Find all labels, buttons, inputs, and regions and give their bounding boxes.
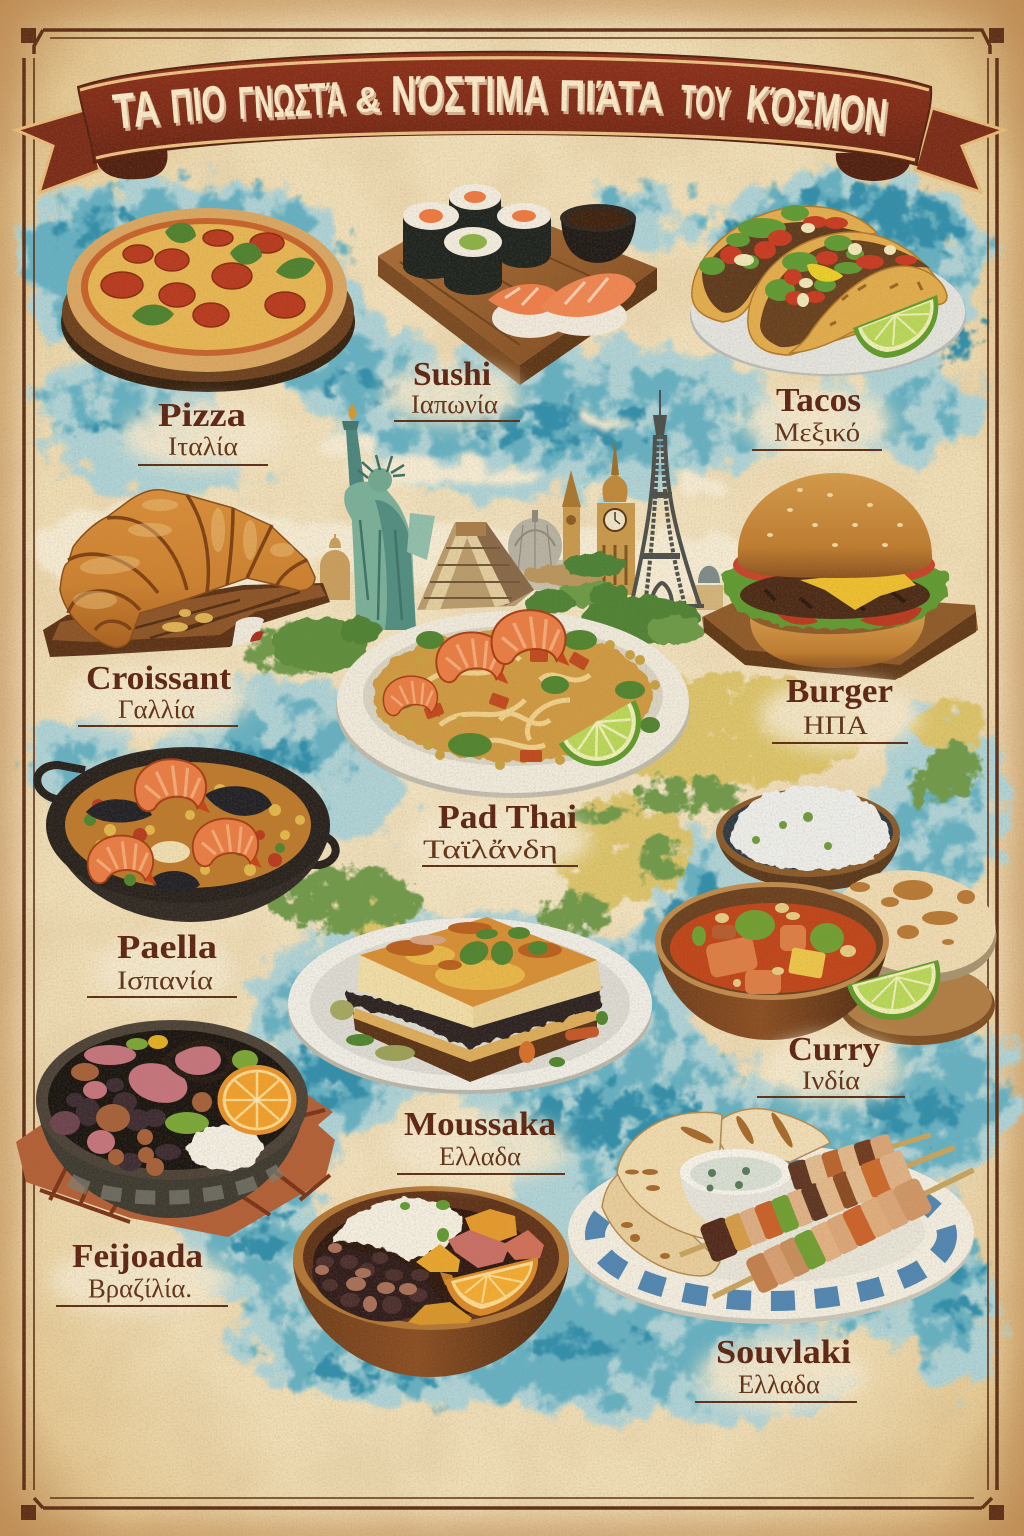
landmark greenery [272, 553, 703, 673]
landmark: stepped pyramid [417, 522, 534, 610]
lime wedge [559, 700, 657, 782]
top bun [738, 473, 932, 578]
title text: ΚΌΣΜΟΝ [744, 74, 890, 145]
right ribbon tail [915, 108, 1004, 192]
curry bowl [656, 945, 888, 1040]
label: Croissant: Croissant [86, 660, 232, 697]
tacos plate [690, 256, 966, 376]
title text: ΠΙΟ [168, 76, 228, 134]
greens [126, 1038, 258, 1134]
noodles [372, 629, 652, 761]
mussels [86, 786, 272, 893]
label: Moussaka: Moussaka [404, 1106, 556, 1143]
black beans [312, 1248, 440, 1322]
nigiri [488, 273, 636, 338]
food: pizza [61, 208, 355, 392]
landmark: grey dome [508, 510, 570, 590]
banner piping [80, 58, 929, 160]
top skewer [787, 1122, 935, 1191]
title text: ΤΟΥ [679, 76, 731, 128]
croissant wooden board [43, 583, 330, 657]
label: Burger [772, 673, 908, 743]
bottom meat layer [353, 1012, 597, 1082]
label: Souvlaki: Souvlaki [716, 1334, 851, 1371]
label: Croissant: Γαλλία [118, 695, 195, 724]
title text: ΠΙΆΤΑ [561, 73, 666, 126]
meat and squash chunks [408, 1209, 544, 1325]
label: Tacos: Μεξικό [774, 418, 860, 447]
landmark: far right dome [695, 566, 723, 610]
golden crust top [360, 917, 597, 1007]
front taco shell [748, 232, 947, 355]
orange slice [217, 1065, 297, 1135]
title text: ΝΌΣΤΙΜΑ [391, 66, 548, 124]
label: Feijoada [56, 1238, 228, 1306]
white rice [332, 1198, 462, 1260]
label: Paella [87, 929, 237, 997]
white rice [730, 786, 890, 870]
label: Feijoada: Feijoada [72, 1238, 203, 1275]
middle skewer [673, 1129, 962, 1274]
label: Pad Thai [422, 799, 578, 866]
food: curry [655, 860, 1003, 1045]
label: Pad Thai: Ταϊλἄνδη [423, 835, 558, 864]
skewers [673, 1122, 982, 1314]
label: Croissant [78, 660, 238, 726]
label: Moussaka: Ελλαδα [439, 1142, 521, 1171]
pad thai plate [336, 618, 690, 798]
banner body [78, 52, 931, 165]
food: bean bowl [293, 1186, 569, 1377]
title text: ΤΑ [112, 82, 164, 143]
back taco [692, 206, 877, 322]
left ribbon curl [96, 150, 168, 179]
food: souvlaki [568, 1109, 982, 1324]
label: Pizza: Ιταλία [168, 432, 238, 461]
pizza crust [67, 208, 347, 372]
title text: ΤΟΥ [681, 79, 733, 131]
plaid mat [16, 1090, 335, 1237]
lime wedge [847, 960, 940, 1020]
label: Sushi: Sushi [413, 356, 491, 393]
label: Curry: Ινδία [802, 1066, 860, 1095]
label: Feijoada: Βραζίλία. [88, 1274, 192, 1303]
label: Souvlaki: Ελλαδα [738, 1370, 820, 1399]
title text: ΝΌΣΤΙΜΑ [393, 69, 550, 127]
title text: & [357, 82, 383, 123]
naan bread [827, 867, 1003, 993]
shrimp [436, 632, 508, 684]
title text: ΠΙΆΤΑ [559, 70, 664, 123]
landmark: Eiffel Tower [628, 390, 704, 606]
title text: & [355, 79, 381, 120]
soy sauce bowl [561, 218, 636, 263]
wooden saucer [839, 965, 995, 1045]
bottom skewer [705, 1153, 982, 1314]
landmark: church dome [320, 534, 350, 600]
title text: ΤΑ [110, 79, 162, 140]
curry pieces [705, 925, 806, 994]
pizza wooden board [61, 252, 355, 392]
label halos [50, 365, 920, 1411]
label: Moussaka [397, 1106, 565, 1174]
label: Tacos [752, 382, 882, 450]
food: paella [37, 747, 336, 922]
sushi rolls [403, 184, 551, 295]
label: Sushi [394, 356, 520, 421]
pan handles [37, 765, 85, 800]
title banner [16, 52, 1004, 193]
tzatziki bowl [680, 1172, 792, 1228]
landmarks skyline [272, 390, 723, 673]
basil leaves [132, 223, 315, 326]
title text: ΠΙΟ [170, 79, 230, 137]
food: tacos [690, 205, 966, 376]
tomato [733, 548, 817, 582]
white rice [188, 1125, 264, 1171]
label: Sushi: Ιαπωνία [411, 390, 498, 419]
label: Paella: Ισπανία [117, 966, 213, 995]
label: Pizza: Pizza [158, 397, 246, 434]
shrimp [135, 759, 210, 813]
label: Paella: Paella [117, 929, 217, 966]
label: Curry: Curry [788, 1031, 880, 1068]
front taco filling [760, 240, 930, 347]
title text: ΓΝΩΣΤΆ [237, 71, 346, 129]
pepperoni [101, 230, 305, 327]
right ribbon curl [836, 152, 911, 181]
label: Curry [757, 1031, 905, 1097]
landmark: Statue of Liberty [342, 404, 435, 630]
burger wooden board [702, 590, 978, 678]
title text: ΓΝΩΣΤΆ [239, 74, 348, 132]
lettuce [722, 560, 948, 628]
lime wedge [853, 295, 938, 358]
label: Souvlaki [695, 1334, 857, 1402]
yellow layer [353, 1007, 597, 1062]
label: Pad Thai: Pad Thai [438, 799, 577, 836]
title text: ΚΌΣΜΟΝ [746, 77, 892, 148]
label: Tacos: Tacos [776, 382, 861, 419]
dark aubergine layer [347, 988, 602, 1048]
label: Burger: Burger [786, 673, 893, 710]
sushi board [378, 256, 520, 385]
title text [110, 66, 892, 148]
bechamel left face [357, 955, 473, 1028]
landmark: Big Ben [597, 440, 635, 595]
food: sushi [378, 184, 657, 385]
front taco flap [790, 266, 947, 353]
beef patty [740, 571, 930, 619]
food: burger [702, 473, 978, 680]
left ribbon tail [16, 110, 100, 193]
food: rice bowl [716, 786, 900, 890]
beans and meat [50, 1078, 181, 1171]
pita bread [602, 1109, 830, 1276]
lower bun [750, 615, 925, 668]
black bowl [37, 1095, 307, 1218]
bechamel right face [473, 960, 602, 1028]
food: moussaka [288, 917, 652, 1094]
food: pad thai [336, 610, 690, 798]
landmark: clock tower small [562, 470, 581, 577]
moussaka plate [288, 926, 652, 1094]
orange slice [445, 1257, 538, 1316]
blue patterned plate [568, 1148, 974, 1324]
paella pan [48, 818, 330, 922]
side garnishes [330, 1000, 608, 1067]
croissant pastry [60, 490, 315, 647]
food: croissant [43, 490, 330, 657]
label: Burger: ΗΠΑ [803, 711, 868, 740]
herb garnish [456, 927, 548, 969]
cheese [800, 570, 916, 610]
rice and vegetables [95, 784, 305, 886]
food: feijoada [16, 1020, 335, 1237]
label: Pizza [138, 397, 268, 465]
